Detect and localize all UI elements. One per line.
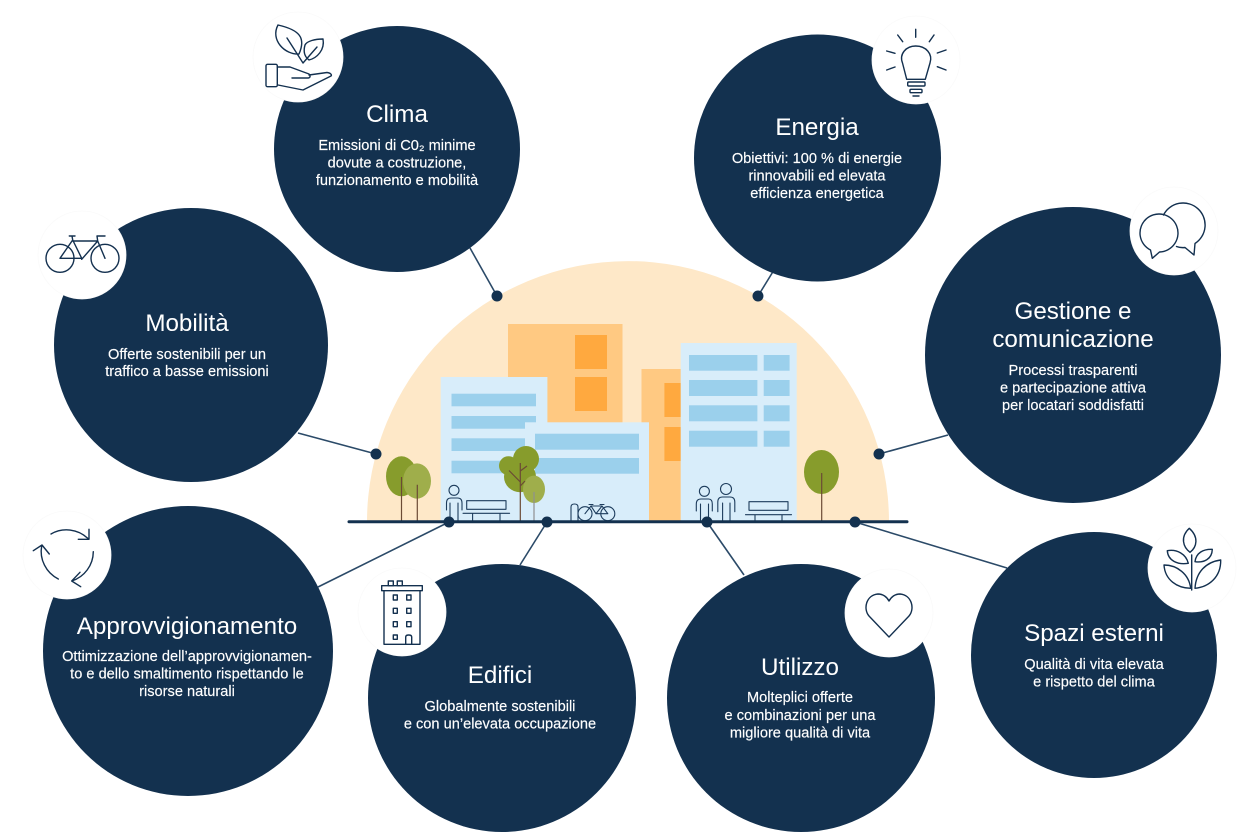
text block: Globalmente sostenibili: [425, 699, 575, 715]
blue right building: [681, 343, 797, 522]
panel: Gestione e comunicazione: [925, 187, 1221, 503]
bicycle and rack: [571, 504, 615, 521]
icon: bicycle: [46, 236, 119, 272]
blue left building: [441, 377, 547, 522]
text block: traffico a basse emissioni: [105, 364, 269, 380]
icon: recycling arrows: [33, 529, 93, 587]
connectors: [298, 248, 1007, 587]
icon: apartment building: [382, 581, 422, 644]
text block: e combinazioni per una: [725, 708, 876, 724]
trees middle: [499, 446, 545, 521]
text block: per locatari soddisfatti: [1002, 398, 1144, 414]
text block: Qualità di vita elevata: [1024, 657, 1164, 673]
text block: Processi trasparenti: [1009, 363, 1137, 379]
text block: Ottimizzazione dell’approvvigionamen-: [62, 649, 312, 665]
people right: [696, 484, 735, 521]
panel: Energia: [694, 16, 960, 282]
text block: Molteplici offerte: [747, 690, 853, 706]
text block: e con un’elevata occupazione: [404, 716, 596, 732]
text block: e partecipazione attiva: [1000, 380, 1147, 396]
panel: Spazi esterni: [971, 524, 1236, 778]
text block: funzionamento e mobilità: [316, 173, 479, 189]
heading: comunicazione: [992, 326, 1154, 353]
heading: Approvvigionamento: [77, 613, 297, 640]
text block: to e dello smaltimento rispettando le: [70, 666, 304, 682]
bench left: [463, 501, 510, 521]
text block: Obiettivi: 100 % di energie: [732, 151, 902, 167]
heading: Edifici: [468, 662, 532, 689]
icon: heart: [866, 594, 912, 637]
trees left: [386, 456, 431, 521]
central illustration: city district: [349, 261, 907, 522]
text block: Offerte sostenibili per un: [108, 347, 266, 363]
blue middle building: [525, 422, 649, 522]
panel: Utilizzo: [667, 564, 935, 832]
text block: dovute a costruzione,: [328, 156, 466, 172]
orange narrow building: [642, 369, 682, 522]
text block: migliore qualità di vita: [730, 726, 871, 742]
heading: Clima: [366, 101, 428, 128]
bench right: [746, 502, 792, 521]
icon: light bulb: [887, 29, 946, 96]
text block: e rispetto del clima: [1033, 674, 1156, 690]
panel: Approvvigionamento: [23, 506, 333, 796]
text block: Emissioni di C0₂ minime: [318, 138, 476, 154]
heading: Energia: [775, 114, 859, 141]
heading: Utilizzo: [761, 654, 839, 681]
panel: Clima: [253, 12, 520, 272]
text block: efficienza energetica: [750, 186, 885, 202]
text block: rinnovabili ed elevata: [748, 168, 886, 184]
sun dome: [367, 261, 889, 522]
icon: plant: [1164, 528, 1221, 590]
text block: risorse naturali: [139, 684, 235, 700]
icon: hand with leaves: [266, 25, 331, 90]
heading: Mobilità: [145, 310, 229, 337]
heading: Gestione e: [1015, 298, 1131, 325]
icon: speech bubbles: [1140, 203, 1205, 258]
orange back building: [508, 324, 622, 522]
panel: Edifici: [358, 564, 636, 832]
ground line: [349, 520, 907, 523]
person left: [446, 485, 462, 521]
panel: Mobilità: [38, 208, 328, 482]
tree right: [804, 450, 839, 521]
heading: Spazi esterni: [1024, 620, 1164, 647]
